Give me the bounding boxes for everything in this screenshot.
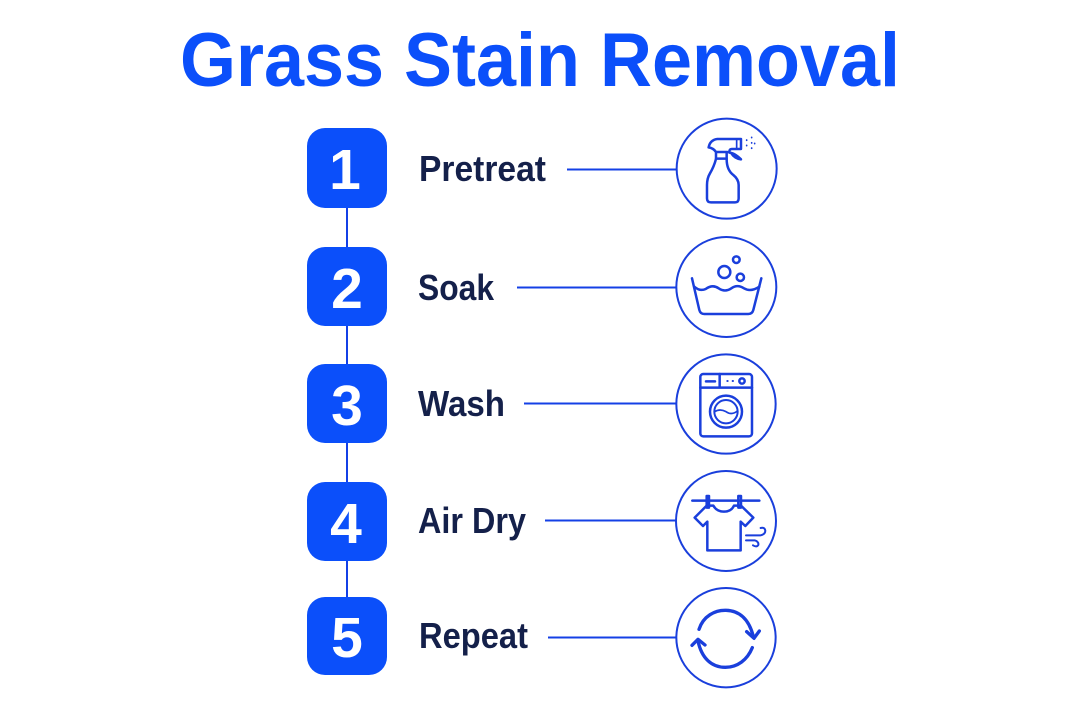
- step 4: air dry: [307, 471, 776, 571]
- number badge 2: 2: [331, 257, 363, 321]
- number badge 3: 3: [331, 374, 363, 438]
- number badge 5: [307, 597, 387, 675]
- icon: wash basin: [676, 237, 776, 337]
- label: Wash: Wash: [418, 383, 505, 424]
- label: Soak: Soak: [418, 267, 495, 308]
- connector line 3: [524, 402, 677, 404]
- step 2: soak: [307, 237, 776, 337]
- number badge 3: [307, 364, 387, 443]
- timeline connector: [346, 200, 348, 610]
- label: Repeat: Repeat: [419, 615, 528, 656]
- connector line 4: [545, 520, 676, 522]
- number badge 5: 5: [331, 606, 363, 670]
- icon: washing machine: [676, 354, 776, 454]
- connector line 5: [548, 636, 676, 638]
- icon: repeat arrows: [676, 588, 776, 687]
- step 1: pretreat: [307, 119, 777, 219]
- number badge 4: [307, 482, 387, 561]
- step 3: wash: [307, 354, 776, 454]
- label: Pretreat: Pretreat: [419, 148, 546, 189]
- number badge 1: 1: [329, 138, 361, 202]
- connector line 1: [567, 168, 677, 170]
- icon: shirt on clothesline: [676, 471, 776, 571]
- number badge 1: [307, 128, 387, 208]
- step 5: repeat: [307, 588, 776, 687]
- icon: spray bottle: [677, 119, 777, 219]
- label: Air Dry: Air Dry: [418, 500, 526, 541]
- title: Grass Stain Removal: [180, 18, 900, 103]
- number badge 2: [307, 247, 387, 326]
- connector line 2: [517, 286, 677, 288]
- number badge 4: 4: [330, 492, 362, 556]
